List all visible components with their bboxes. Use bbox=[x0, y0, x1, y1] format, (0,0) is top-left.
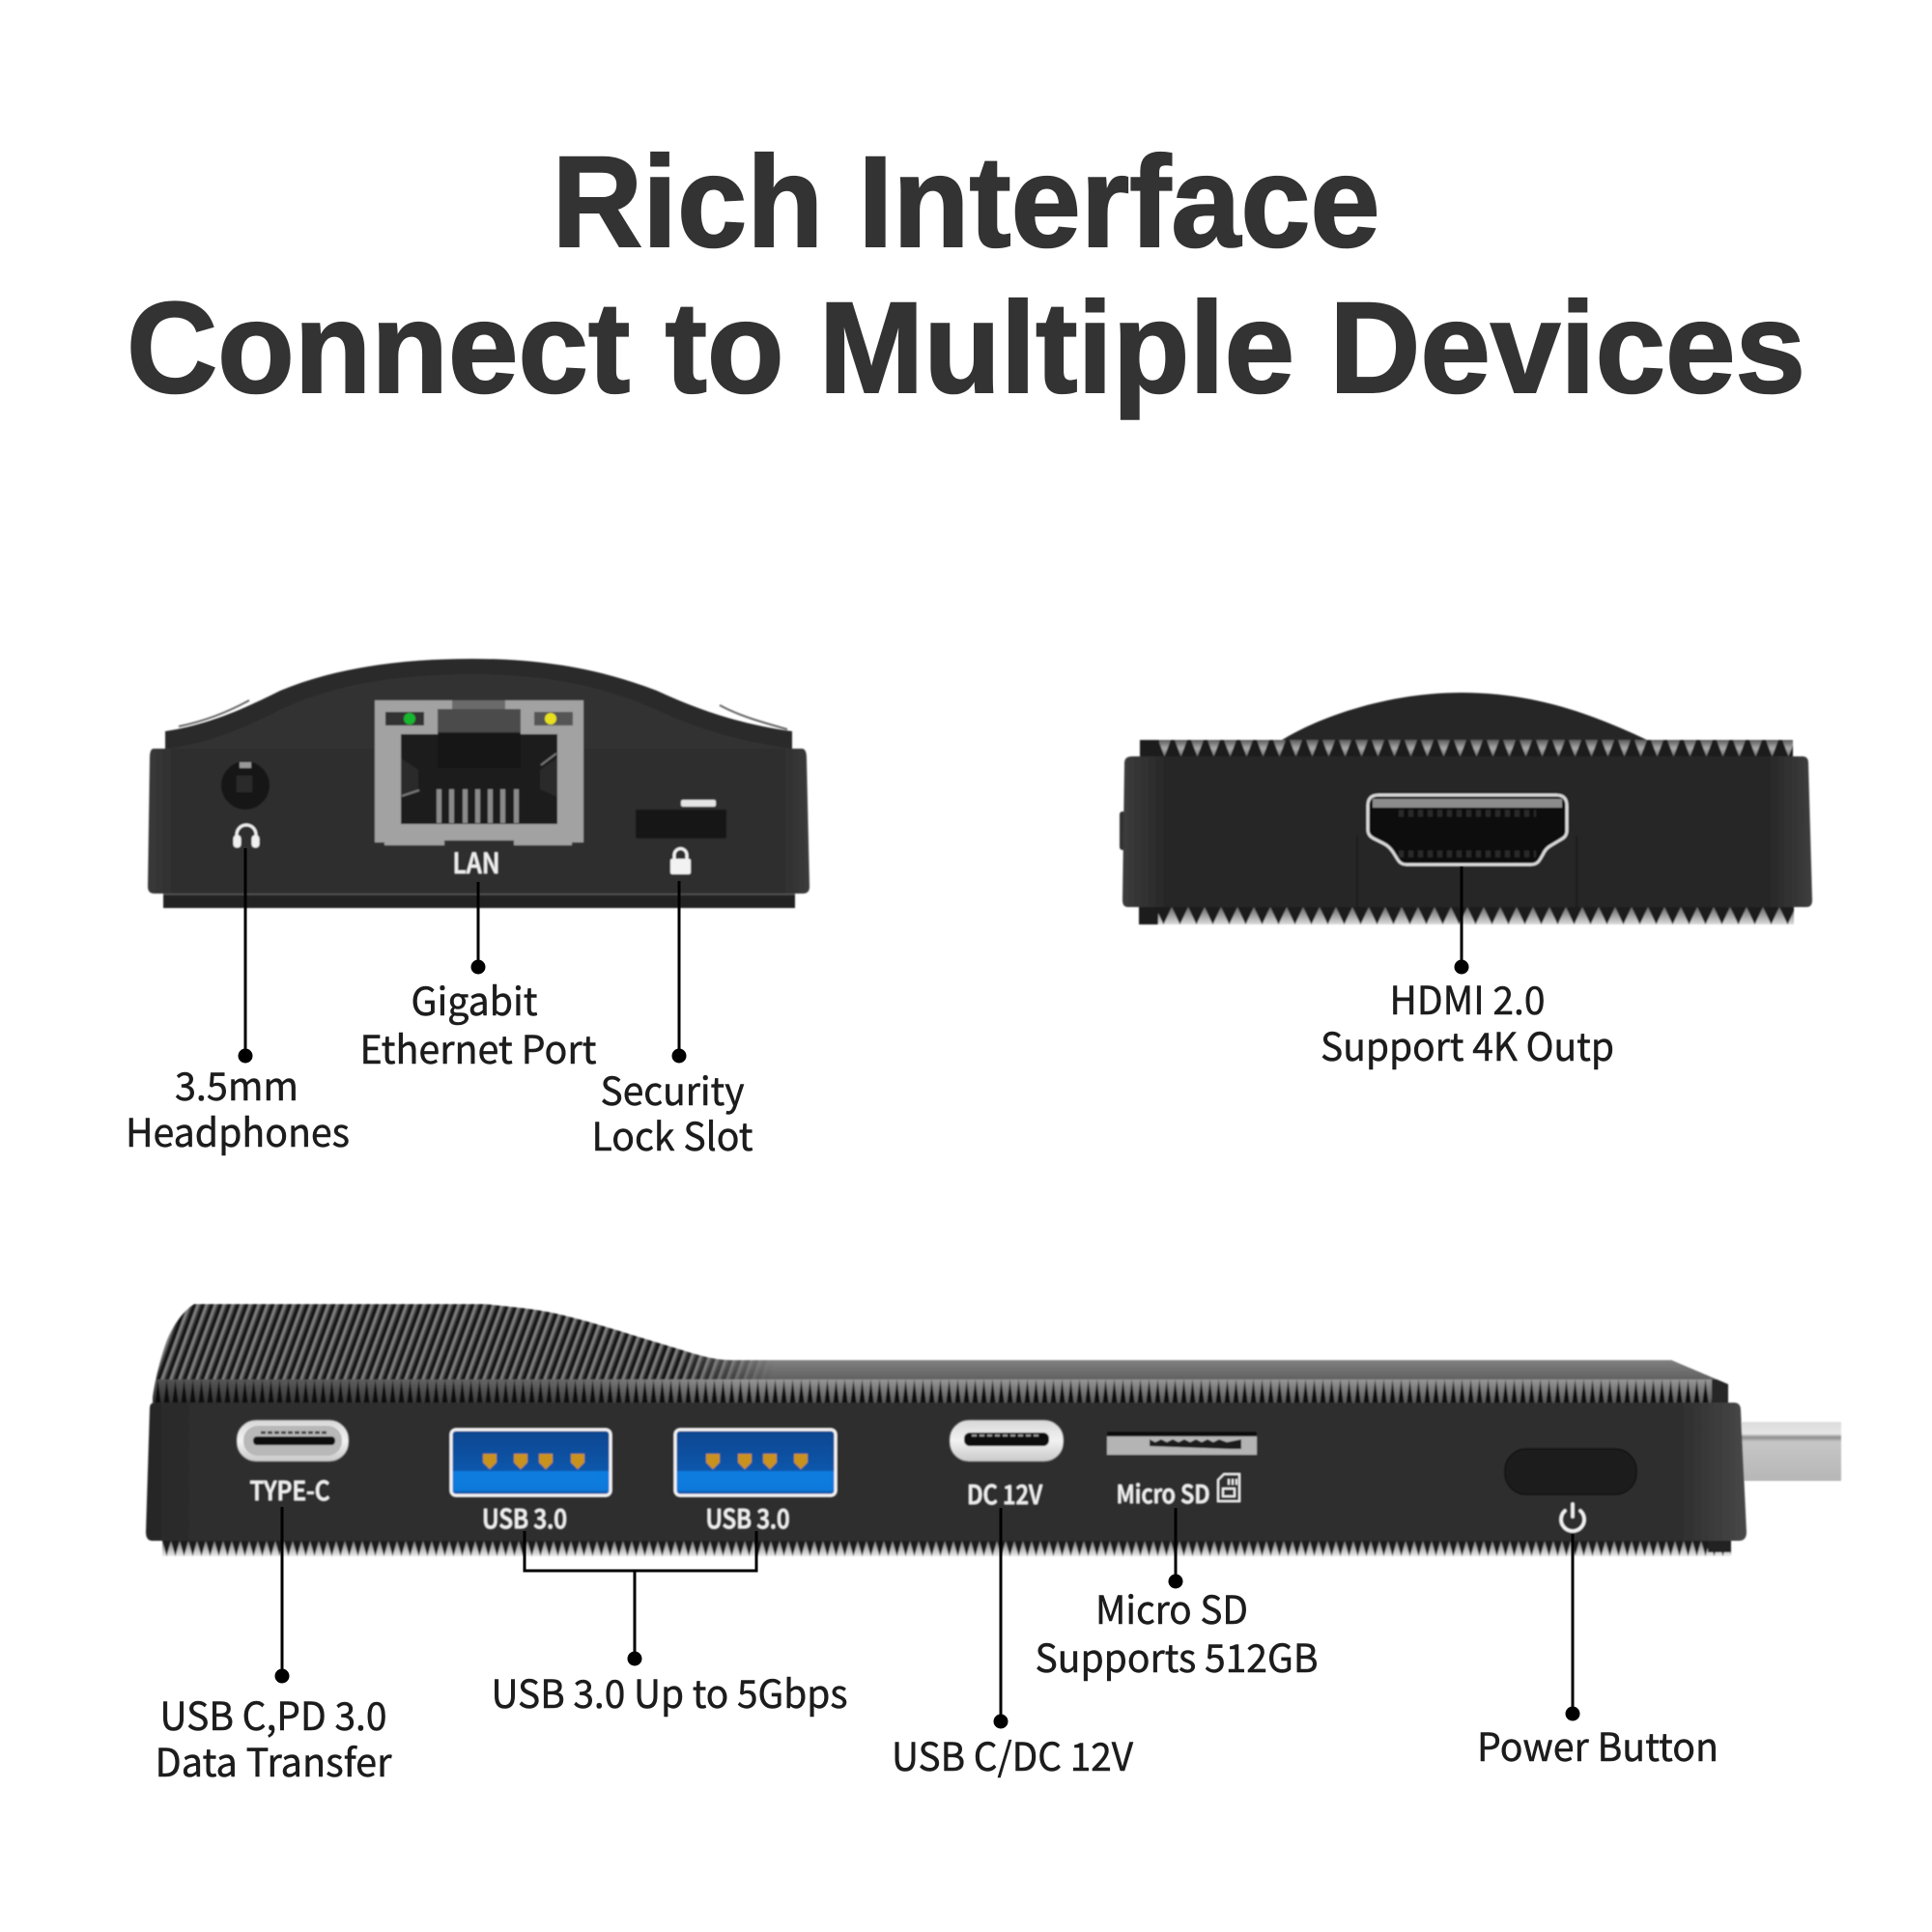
title bbox=[127, 130, 1805, 420]
callout: 3.5mm headphones: Headphones bbox=[126, 1102, 350, 1158]
callout: USB C PD 3.0: USB C,PD 3.0 bbox=[160, 1686, 386, 1742]
icon: headphones bbox=[235, 825, 258, 846]
callout: micro SD supports 512GB: Supports 512GB bbox=[1036, 1628, 1318, 1684]
callout: gigabit ethernet port bbox=[359, 882, 597, 1075]
callout: gigabit ethernet port: Gigabit bbox=[412, 971, 537, 1027]
callout: security lock slot bbox=[591, 881, 753, 1162]
label: USB 3.0 left: USB 3.0 bbox=[482, 1498, 567, 1536]
callout: HDMI 2.0 bbox=[1321, 867, 1614, 1072]
callout: security lock slot: Lock Slot bbox=[591, 1106, 753, 1162]
connector plug bbox=[1739, 1422, 1841, 1481]
callout: USB C/DC 12V bbox=[892, 1508, 1133, 1782]
device body: finned top bbox=[145, 1299, 1739, 1406]
icon: padlock bbox=[670, 849, 691, 874]
label: USB 3.0 right: USB 3.0 bbox=[705, 1498, 790, 1536]
callout: USB C/DC 12V: USB C/DC 12V bbox=[892, 1726, 1133, 1782]
port: RJ45 LAN bbox=[375, 700, 583, 845]
label: LAN: LAN bbox=[452, 841, 500, 882]
port: USB 3.0 right bbox=[675, 1430, 836, 1495]
callout: micro SD supports 512GB: Micro SD bbox=[1095, 1579, 1248, 1635]
callout: HDMI 2.0: HDMI 2.0 bbox=[1389, 970, 1546, 1026]
callout: USB C PD 3.0: Data Transfer bbox=[155, 1732, 392, 1788]
device body: rear view bbox=[148, 659, 810, 908]
port: DC 12V bbox=[950, 1420, 1064, 1462]
port: Type-C bbox=[237, 1420, 349, 1462]
icon: SD card bbox=[1218, 1474, 1239, 1501]
label: TYPE-C: TYPE-C bbox=[249, 1470, 330, 1508]
callout: power button bbox=[1477, 1534, 1719, 1773]
label: DC 12V: DC 12V bbox=[967, 1474, 1043, 1512]
callout: gigabit ethernet port: Ethernet Port bbox=[359, 1019, 597, 1075]
callout: 3.5mm headphones bbox=[126, 848, 350, 1158]
title: Rich Interface bbox=[553, 130, 1379, 274]
device body: HDMI side bbox=[1120, 693, 1812, 924]
callout: micro SD supports 512GB bbox=[1036, 1508, 1318, 1684]
callout: USB 3.0 up to 5Gbps bbox=[491, 1531, 848, 1719]
callout: HDMI 2.0: Support 4K Outp bbox=[1321, 1016, 1614, 1072]
title: Connect to Multiple Devices bbox=[127, 276, 1805, 420]
label: Micro SD: Micro SD bbox=[1117, 1475, 1209, 1511]
port: HDMI bbox=[1368, 795, 1567, 865]
callout: 3.5mm headphones: 3.5mm bbox=[175, 1056, 298, 1112]
port: USB 3.0 left bbox=[451, 1430, 611, 1495]
control: power button bbox=[1505, 1449, 1636, 1494]
panel: long side device bbox=[145, 1299, 1841, 1556]
callout: USB C PD 3.0 bbox=[155, 1507, 392, 1788]
port: headphone jack bbox=[221, 761, 270, 810]
callout: power button: Power Button bbox=[1477, 1717, 1719, 1773]
port: micro SD slot bbox=[1107, 1432, 1257, 1455]
device body: front face bbox=[146, 1403, 1747, 1556]
icon: power symbol bbox=[1561, 1504, 1584, 1531]
port: security lock slot bbox=[636, 799, 726, 838]
callout: security lock slot: Security bbox=[601, 1061, 745, 1117]
panel: rear view device bbox=[148, 659, 810, 908]
callout: USB 3.0 up to 5Gbps: USB 3.0 Up to 5Gbps bbox=[491, 1663, 848, 1719]
panel: HDMI side device bbox=[1120, 693, 1812, 924]
